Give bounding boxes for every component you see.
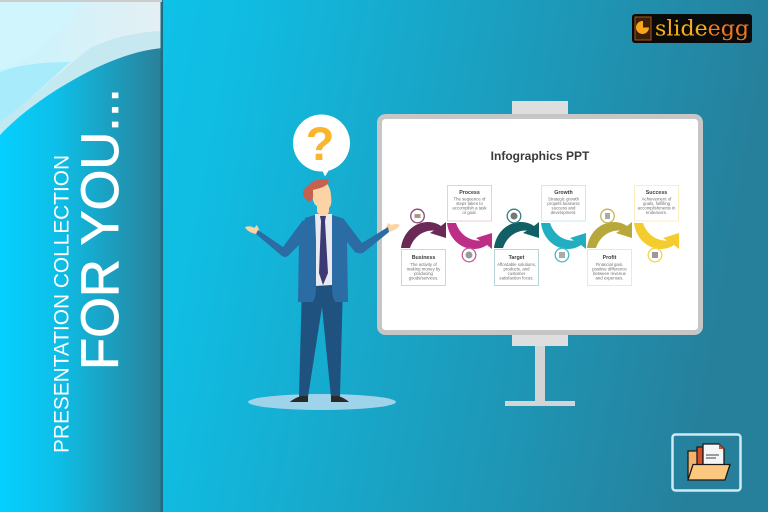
- logo: slideegg: [632, 14, 752, 43]
- hands: [245, 223, 400, 234]
- step: process: steps taken to: [456, 201, 483, 206]
- arms: [256, 218, 389, 257]
- speech bubble with question mark: ?: [306, 117, 334, 170]
- trousers: [299, 283, 343, 397]
- step: success: Achievement of: [642, 196, 672, 202]
- floor shadow: [248, 394, 396, 410]
- step: business: [401, 209, 446, 286]
- step: process: Process: [459, 190, 480, 196]
- step: target: customer: [508, 271, 526, 276]
- step: growth: success and: [552, 206, 576, 210]
- presentation board: [380, 101, 700, 406]
- step: target: Target: [509, 255, 525, 261]
- step: growth: development.: [551, 210, 576, 215]
- step: process: [447, 186, 492, 262]
- board title: Infographics PPT: [491, 149, 590, 163]
- step: profit: Profit: [603, 255, 617, 261]
- hair: [303, 179, 329, 202]
- step: success: accomplishments in: [638, 206, 676, 210]
- step: business: The activity of: [410, 262, 438, 267]
- step: success: goals, fulfilling: [643, 201, 671, 206]
- step: success: endeavors.: [646, 210, 667, 215]
- folder button: [672, 434, 740, 490]
- step: process: or goal.: [462, 210, 477, 215]
- neck and face: [313, 184, 331, 216]
- step: target: products, and: [503, 266, 530, 272]
- step: target: satisfaction focus.: [499, 276, 534, 280]
- sidebar title: FOR YOU...: [71, 88, 130, 370]
- shirt: [315, 214, 332, 286]
- step: growth: propels business: [547, 201, 580, 206]
- step: business: producing: [414, 271, 434, 276]
- businessman: [245, 179, 400, 402]
- step: profit: positive difference: [592, 266, 627, 272]
- jacket: [298, 215, 348, 302]
- step: growth: [541, 186, 586, 262]
- step: process: The sequence of: [453, 196, 486, 202]
- step: business: making money by: [407, 266, 441, 272]
- step: profit: between revenue: [593, 271, 627, 276]
- step: profit: [587, 209, 632, 286]
- step: process: accomplish a task: [452, 206, 487, 210]
- step: growth: Strategic growth: [548, 196, 580, 202]
- sidebar subtitle: PRESENTATION COLLECTION: [50, 155, 74, 453]
- step: growth: Growth: [554, 190, 573, 196]
- step: target: [494, 209, 539, 286]
- step: target: Affordable solutions,: [497, 262, 536, 267]
- logo: slideegg: slideegg: [655, 16, 749, 40]
- tie: [319, 216, 328, 285]
- step: success: Success: [646, 190, 667, 196]
- step: success: [634, 186, 679, 262]
- shoes: [290, 396, 349, 402]
- speech bubble with question mark: [293, 114, 350, 176]
- board stand: [505, 101, 575, 406]
- step: profit: Financial gain,: [596, 262, 623, 267]
- step: profit: and expenses.: [596, 276, 623, 280]
- step: business: Business: [412, 255, 435, 261]
- board frame: [380, 116, 700, 332]
- panel: left sidebar: [0, 0, 163, 512]
- step: business: goods/services.: [409, 276, 438, 280]
